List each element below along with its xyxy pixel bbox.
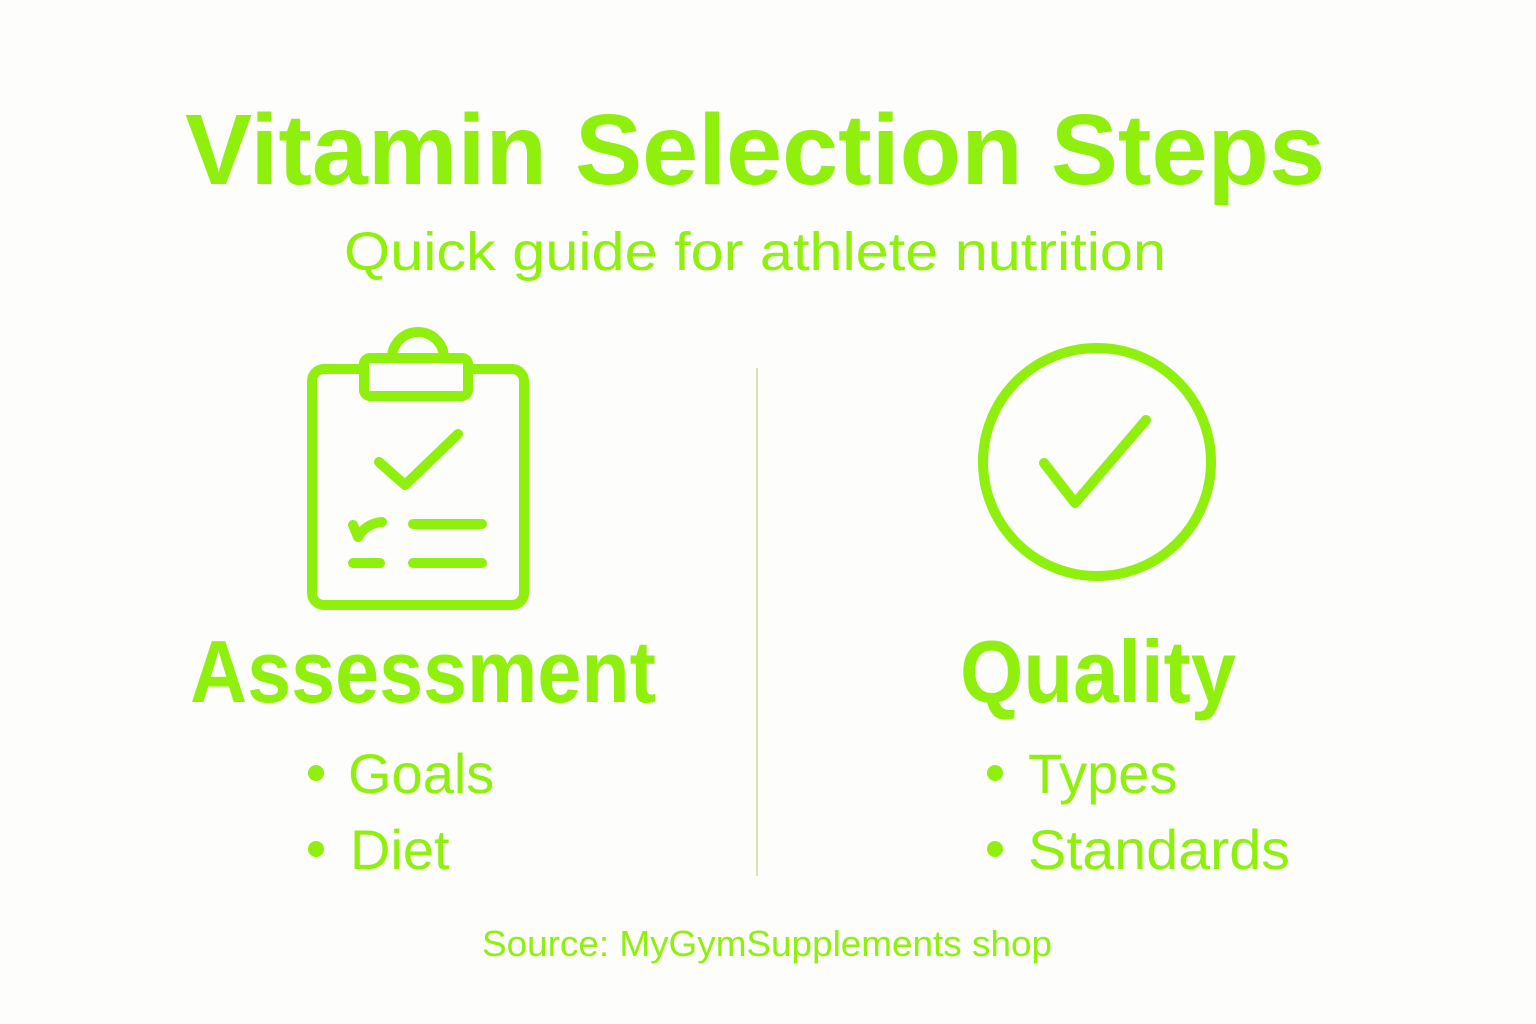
heading: Quality: Quality — [960, 622, 1236, 721]
title: Vitamin Selection Steps — [185, 94, 1325, 206]
list: assessment: Goals — [348, 742, 494, 805]
source: Source: MyGymSupplements shop — [482, 923, 1052, 964]
heading: Assessment: Assessment — [190, 622, 656, 721]
list: quality: Types — [1028, 742, 1177, 805]
list: quality — [987, 742, 1290, 881]
list: assessment — [308, 742, 494, 881]
list: quality: Standards — [1028, 818, 1290, 881]
subtitle: Quick guide for athlete nutrition — [344, 222, 1166, 282]
list: assessment: Diet — [350, 818, 450, 881]
icon: check circle — [983, 348, 1211, 576]
divider — [756, 368, 758, 876]
icon: clipboard — [312, 332, 524, 605]
